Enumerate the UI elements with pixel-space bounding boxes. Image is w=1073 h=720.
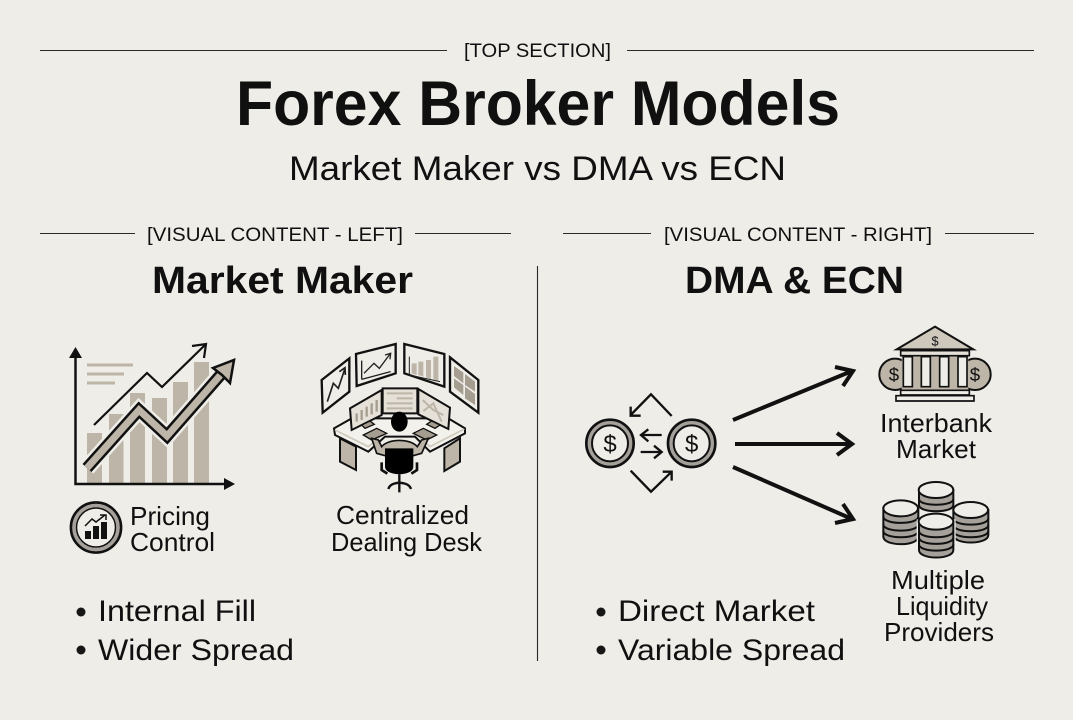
label: pricing control: Control [130, 527, 215, 557]
chart: rising bars with arrows [69, 344, 235, 490]
operator [372, 438, 428, 456]
icon: interbank bank: $ [889, 364, 900, 385]
section tag: top: [TOP SECTION] [464, 41, 611, 62]
label: centralized dealing desk: Dealing Desk [331, 527, 483, 557]
icon: interbank bank [879, 327, 991, 401]
bullet list: DMA and ECN [596, 595, 845, 667]
heading: Market Maker: Market Maker [152, 260, 413, 302]
label: pricing control: Pricing [130, 501, 210, 531]
icon: liquidity provider coin stacks [883, 482, 988, 557]
heading: DMA and ECN: DMA & ECN [685, 260, 904, 302]
bullet list: market maker: Wider Spread [98, 634, 294, 667]
icon: dealing desk with operator [334, 388, 465, 492]
section tag: right: [VISUAL CONTENT - RIGHT] [664, 225, 932, 246]
label: centralized dealing desk: Centralized [336, 500, 469, 530]
bullet list: DMA and ECN: Direct Market [618, 595, 816, 628]
title: Forex Broker Models [236, 69, 840, 139]
arrows: routing to market [733, 367, 853, 523]
bullet list: DMA and ECN: Variable Spread [618, 634, 845, 667]
icon: pricing control badge [71, 502, 121, 552]
bullet list: market maker [76, 595, 294, 667]
icon: exchanging coins: $ [603, 431, 617, 458]
icon: exchanging coins: $ [685, 431, 698, 458]
label: multiple liquidity providers: Liquidity [896, 591, 988, 621]
label: multiple liquidity providers: Multiple [891, 565, 985, 595]
keyboards [362, 421, 440, 440]
desk top [334, 418, 465, 452]
label: interbank market: Interbank [880, 408, 993, 438]
icon: interbank bank: $ [970, 364, 981, 385]
label: interbank market: Market [896, 434, 977, 464]
icon: wall monitors [322, 344, 478, 413]
subtitle: Market Maker vs DMA vs ECN [289, 150, 786, 188]
label: multiple liquidity providers: Providers [884, 617, 994, 647]
icon: exchanging coins [586, 394, 715, 492]
icon: interbank bank: $ [931, 335, 939, 349]
bullet list: market maker: Internal Fill [98, 595, 256, 628]
section tag: left: [VISUAL CONTENT - LEFT] [147, 225, 403, 246]
desk legs [340, 438, 460, 471]
desk screens [350, 390, 382, 430]
